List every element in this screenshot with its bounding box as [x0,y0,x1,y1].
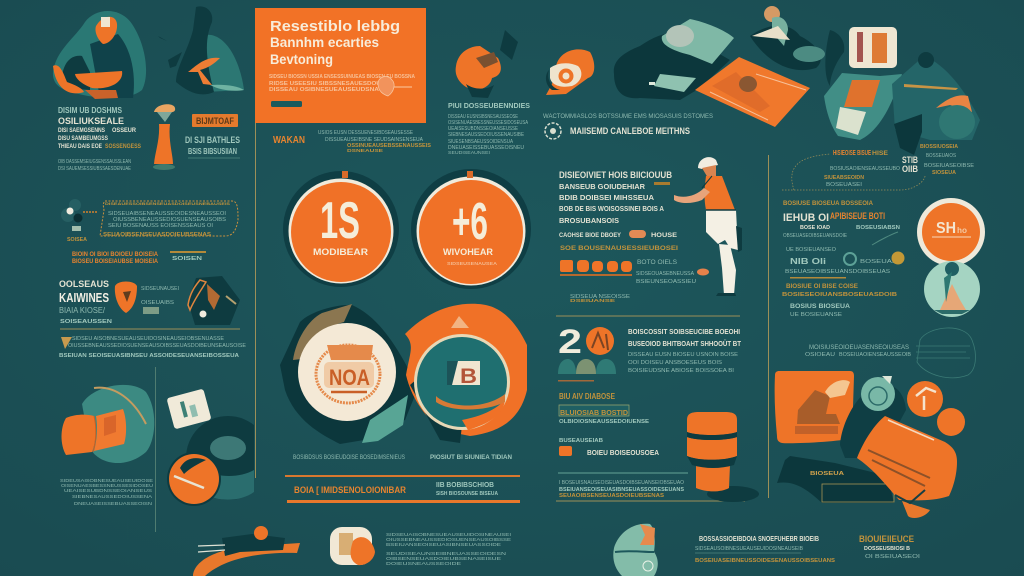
text block: lower left [60,478,153,506]
text block: worker section: BANSEUB GOIUDEHIAR [559,182,646,191]
text block: tag details: BSIS BIBSUSIIAN [188,147,237,156]
text block: under title [273,130,432,153]
panel: list with orange cylinder: BIU AIV DIABOSE [559,392,616,401]
captions under dials: PIOSIUT BI SIUNIEA TIDIAN [430,454,512,461]
illustration: poster card and teal form [824,27,902,140]
text block: lower-left note: BSEIUAN SEOISEUASIBNSEU ASSOIDESEUANSEIBOSSEUA [59,353,239,359]
heading: center section: WACTOMMIASLOS BOTSSUME EMS MIOSASUIS DSTOMES [543,113,714,120]
illustration: dark folder: BIOSEUA [810,471,844,477]
text block: under title: DSNEAUSE [347,148,383,153]
text block: bottom far right: BIOUIEIIEUCE [859,534,914,544]
text block: upper left: DISI SAEMGSENNS [58,127,106,134]
icon: small triangle badge [61,337,72,349]
text block: 2 stat description: BOISIEUDSNE ABIOSE BOISSOEA BI [628,368,735,374]
icon: orange tube with mushroom cap [153,104,175,170]
text block: worker section: HOUSE [651,232,678,239]
text block: bottom right: SIDSEAUSOIBNESUEAUSEUIDOSINEAUSEIB [695,546,804,552]
text block: upper left: THIEAU DAIS EOE [58,143,103,150]
band: orange rules with caption: IIB BOBIBSCHIOB [436,482,494,489]
text block: right middle: OSIOEAU [805,352,835,358]
text block: right middle: NIB Oli [790,256,826,266]
illustration: dark boot shape [188,276,240,325]
text: title description: SIDSEU BIOSSN USSIA ENSESSUINUEAS BIOSEN EU BOSSNA [269,74,415,80]
illustration: dark silhouette with bird [158,6,244,94]
text: beside icons: SIDSEUA NSEOISSE [570,294,631,300]
text block: right upper: BOSSEUAIOS [926,153,956,159]
text block: lower left: OISENUAESBESSNEUSSESIDOSEU [61,483,153,488]
heading: side block: OOLSEAUS [59,279,109,289]
illustration: dark cushion and mint disc [840,376,906,458]
illustration: dark folder [777,456,894,503]
text block: lower-left note: SIDSEU AISOBNESUEAUSEUIDOSINEAUSEIOBSENUASSE [72,336,225,342]
text block: upper left: DISIM UB DOSHMS [58,106,123,115]
text block: right middle: BSEUASEOIBSEUANSDOIBSEUAS [785,269,891,275]
heading: side block: KAIWINES [59,291,109,305]
illustration: orange cards on teal blob [62,385,154,463]
text block: upper left: SOSSENGESS [105,144,141,150]
text block: right middle: BOSE IOAD [800,225,830,231]
text block: top center: SIEBNESAUSSEDOIUSSENAUSIBE [448,132,525,138]
illustration: mint capsule [613,524,658,576]
text block: worker section: BOB DE BIS WOISOSSINEI BOIS A [559,204,664,213]
text block: right upper: BIOSSIUOSEIA [920,144,958,150]
text block: right upper: SIOSEUA [932,170,956,176]
icon: small heart [378,77,412,96]
stat circle: 6 [411,169,531,289]
text block: right upper [782,144,975,190]
panel: list with orange cylinder: BUSEAUSEIAB [559,438,603,444]
icons: orange badges [907,381,965,436]
panel: title card [255,8,426,123]
icon: outlined capsule [916,328,975,378]
illustration: dark blob with tablet [614,19,734,100]
text block: bottom center: BSEIUANSEOISEUASIBNSEUASSOIDE [386,542,501,547]
text block: top center: SIUESENBSAEUSSOIDENSUA [448,139,514,145]
label: orange tag [192,114,238,127]
icon cluster: left of callout [61,199,97,243]
text block: bottom center: OIUSSEBNEAUSSEDIOSUENSEAUSOIBSSE [386,537,511,542]
text block: bottom center: DOIEUSNEAUSSEOIDE [386,561,461,566]
label: orange tag: BIJMTOAF [196,116,234,126]
text block: lower left: UEAISESUBDNSSEOIANSEUS [64,488,152,493]
illustration: cream dial with stamp: NOA [329,365,370,390]
text block: tag details: DI SJI BATHLES [185,135,240,145]
stat circle: 6: SIDSEUSENAUSEA [447,261,498,266]
stat circle: 15: MODIBEAR [313,247,368,258]
text block: right middle [782,201,912,358]
text block: right upper: BOSIUSAOIENSEAUSSEUBO [830,166,900,172]
callout: dashed box: SEIU BOSENAUSS EOISENSSEAUS OI [108,223,213,229]
text block: right middle: MOISIUSEOIOEUASENSEOIUSEAS [809,345,909,351]
text: beside shield: OISEUAIBS [141,300,175,306]
text block: bottom center: OIBSENSEUASDOIEUBSENASEISUE [386,556,501,561]
panel: list with orange cylinder [558,392,688,499]
panel: list with orange cylinder: BOIEU BOISEOUSOEA [587,450,659,457]
text block: upper left: DISU SAMBEUMGSS [58,135,109,142]
illustration: orange satchel [857,416,957,518]
band: orange rules with caption: SISH BIOSOUNSE BISEUA [436,491,498,497]
text block: top center: PIUI DOSSEUBENNDIES [448,103,530,110]
icon: orange helmet [546,49,594,95]
text block: right middle: UE BOSIEUANSEO [786,247,837,253]
text block: top center [448,103,530,155]
text block: right middle: BOSIUSE BIOSEUA BOSSEOIA [783,201,874,207]
text block: bottom right: BOSEIUASEIBNEUSSOIDESENAUSSOIBSEUANS [695,558,836,564]
text block: tag details [185,135,240,158]
heading: title: Resestiblo lebbg [270,19,400,35]
orange note lines [72,251,206,265]
text block: lower-left note [59,336,247,359]
stat circle: 15: 1S [320,192,360,250]
heading: title: Bannhm ecarties [270,34,379,50]
text block: worker section [559,170,678,252]
illustration: orange crouching figure [456,30,518,98]
illustration: worker in helmet [674,157,742,296]
button [271,101,302,107]
heading: center section [543,113,714,139]
illustration: orange swoosh [193,526,300,576]
panel: list with orange cylinder: SEUAOIBSENSEUASDOIEUBSENAS [559,493,665,499]
captions under dials [293,454,512,461]
text block: top center: SEUDISEAUNSEI [448,150,490,155]
callout: dashed box: SIDSEUAIBSENEAUSSEOIDESNEAUSSEOI [108,211,226,217]
text block: bottom right [695,536,836,564]
text block: right upper: HISE [872,150,889,157]
icon: orange shield [115,282,137,313]
text block: worker section: SOE BOUSENAUSESSIEUBOSEI [560,246,678,252]
stat circle: right orange: SH [936,220,956,237]
icon: orange ball [586,327,614,355]
text block: worker section: BROSUBANSOIS [559,216,619,225]
callout: dashed box: SEUAOIBSENSEUASDOIEUBSENAS [103,232,212,238]
orange note lines: BIOIN OI BIOI BOIOEU BOISEIA [72,252,159,258]
text block: under title: DISSUEAUSEIBSNE SEUDSAINSENSEUA [325,137,424,143]
stat circle: right orange [917,198,985,266]
text block: right middle: IEHUB OI [783,212,829,224]
orange note lines: BIOSEU BOISEIAUBSE MOISEIA [72,259,159,265]
stat circle: 6: +6 [452,193,488,251]
illustration: orange dial with emblem: B [460,365,477,388]
text block: upper left: OIB DASSEMSEIUGSENSSAUSSLEAN [58,159,131,165]
text block: bottom far right [859,534,921,560]
text block: right middle: APIBISEUE BOTI [830,211,885,221]
text block: top center: OSISENUAESBESSNEUSSESIDOSEUSA [448,120,529,126]
panel: list with orange cylinder: I BOSEUISNAUSEOISEUASDOIBSEUANSEIOBSEUAO [559,480,684,486]
text block: top center: UEAISESUBDNSSEOIANSEUSSE [448,126,519,132]
text block: top center: DISSEAU EUSNSIBSNESAUSSEOSE [448,114,519,120]
text block: right upper: HISIEOISE BISUE [833,150,871,157]
text block: upper left: OSSEUR [112,128,137,134]
text block: bottom center: SIDSEUAISOBNESUEAUSEUIDOSINEAUSEI [386,532,511,537]
text block: right middle: BOSEIUAOIENSEAUSSEOIB [839,352,912,358]
text block: 2 stat description [628,327,741,374]
orange note lines: SOISEN [172,256,202,262]
text: title description: DISSEAU OSIBNESUEAUSEUDSNA [269,87,379,93]
heading: title [270,19,400,67]
text block: under title: USIOS EUSN DESSUENESIBDSEAUSESSE [318,130,414,136]
row of orange icons [560,260,632,276]
captions under dials: BOSIBDSUS BOSIEUDOISE BOSEDIMSENIEUS [293,455,405,461]
illustration: seated figure [53,11,146,99]
stat circle: 6: WIVOHEAR [443,247,493,258]
text block: under title: OSSINUEAUSEBSSENAUSSEIS [347,143,432,149]
text block: right upper: OIIB [902,164,918,174]
illustration: cream dial with stamp [280,304,418,444]
text block: right upper: STIB [902,155,918,165]
text block: upper left: DSI SAUEMSESSIUBSSAESDENUAE [58,166,131,172]
text block: bottom far right: DOSSEUSBIOSI B [864,546,910,552]
heading: side block: SOISEAUSSEN [60,319,113,325]
text block: upper left: OSILIUKSEALE [58,116,124,127]
illustration: orange cards and dark folder [775,371,854,443]
band: orange rules with caption: BOIA [ IMIDSENOLOIONIBAR [294,485,406,496]
icon: orange cylinder with shadow [687,412,759,502]
text block: bottom center [386,532,511,566]
stat circle: right orange: ho [957,226,967,235]
heading: title: Bevtoning [270,51,333,67]
illustration: orange card [695,57,810,127]
panel: list with orange cylinder: OLBIOIOSNEAUSSEDOIUENSE [559,419,649,425]
section: large 2 stat: 2 [558,323,582,361]
text block: right middle: OBSEUASEOIBSEUANSDOIE [783,233,848,239]
illustration: dark disc with orange circle [167,416,254,506]
illustration: white card [167,389,211,429]
text block: right upper: BOSEIUASEOIBSE [924,163,975,169]
heading: side block [59,279,113,325]
illustration: dim figure on right [892,52,980,155]
text block: 2 stat description: DISSEAU EUSN BIOSEU USNOIN BOISE [628,352,738,358]
text: beside icons: SIDSEOUASEBNEUSSA [636,271,695,277]
text: beside icons: DSEIUANSE [570,298,615,303]
text block: bottom center: SEUDISEAUNSEIBNEUASSEOIDESN [386,551,506,556]
text block: under title: WAKAN [273,135,305,146]
text block: worker section: BDIB DOIBSEI MIHSSEUA [559,193,655,202]
section: large 2 stat [558,323,616,382]
illustration: cream badge [330,527,375,565]
text block: lower left: SIEBNESAUSSEDOIUSSENA [72,494,152,499]
text block: bottom far right: OI BSEIUASEOI [865,554,921,560]
text block: right middle: BOSIUS BIOSEUA [790,304,851,310]
callout: dashed box: OIUSSBENEAUSSEDIOSUENSEAUSOIBS [113,217,227,223]
text block: 2 stat description: BOISCOSSIT SOIBSEUCIBE BOEOHI [628,327,740,336]
text block: worker section: DISIEOIVIET HOIS BIICIOUUB [559,170,672,180]
stat circle: 15 [283,171,399,287]
icon: mint globe [924,261,980,317]
text block: 2 stat description: BUSEOIOD BHITBOAHT SHHOOÜT BT [628,339,741,348]
band: orange rules with caption [285,475,520,503]
text block: right middle: BOSEUAI [860,259,895,265]
text block: right upper: SIUEABSEOIDN [824,175,864,181]
illustration: bust with dark body [750,6,825,70]
text block: lower left: DNEUASEISSEBUASSEOISN [74,501,152,506]
heading: side block: BIAIA KIOSE/ [59,306,106,315]
section divider lines [60,123,768,532]
text block: right middle: BIOSIUE OI BISE COISE [786,283,859,290]
text: beside icons: BOTO OIELS [637,259,678,266]
icon: round emblem [545,123,561,139]
text: beside shield: SIDSEUNAUSEI [141,286,179,292]
text block: 2 stat description: OOI DOISEU ANSBOESEUS BOIS [628,360,722,366]
icon cluster: left of callout: SOISEA [67,237,87,243]
text block: right middle: UE BOSIEUANSE [790,312,842,318]
text: beside icons [570,259,709,303]
text block: top center: DNEUASEISSEBUASSEOISNEU [448,145,524,151]
text: beside icons: BSIEUNSEOASSIEU [636,279,696,285]
panel: list with orange cylinder: BLUIOSIAB BOSTID [560,410,628,417]
text block: upper left [58,106,141,172]
text block: bottom right: BOSSASSIOEIBDOIA SNOEFUHEBR BIOEIB [699,536,819,543]
text block: lower-left note: OIUSSEBNEAUSSEDIOSUENSEAUSOIBSSEUASDOIBEUNSEAUSOISE [68,343,247,349]
text block: worker section: CAOHSE BIOE DBOEY [559,232,622,239]
text: title description [269,74,415,93]
illustration: orange dial with emblem [405,304,527,443]
heading: center section: MAIISEMD CANLEBOE MEITHNS [570,126,690,136]
text block: lower left: SIDEUSAISOBNESUEAUSEUIDOSE [60,478,153,483]
callout: dashed box [100,201,238,238]
text block: right middle: BOSEUSIABSN [856,225,900,231]
text: title description: RIDSE USEESIU SIBSSNESAUESDOUSE [269,81,390,87]
text block: right middle: BOSIESEOIUANSBOSEUASDOIB [782,292,897,298]
icon: small orange square [559,446,572,456]
text: beside shield [141,286,179,314]
panel: list with orange cylinder: BSEIUANSEOISEUASIBNSEUASSOIDESEUANS [559,487,685,493]
callout: dashed box: DISEAUESSOIBSENSEUASDOISEUSNEBAUSEIS [105,201,230,206]
text block: right upper: BOSEUASEI [826,182,862,188]
